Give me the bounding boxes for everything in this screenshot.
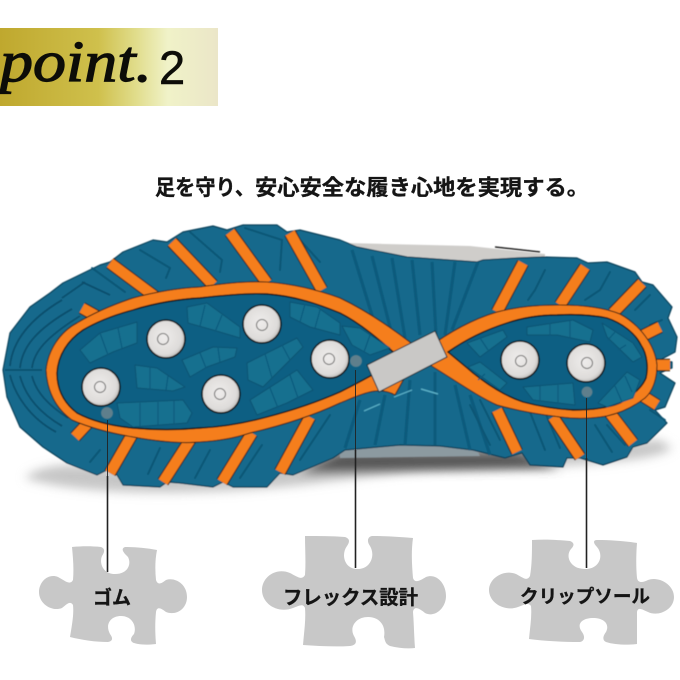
flex plate [367, 331, 447, 392]
label: flex design: フレックス設計 [283, 586, 418, 609]
header banner: point.2: point. [0, 29, 152, 94]
stud 6 [501, 341, 539, 379]
header banner: point.2 [0, 28, 218, 106]
stud 7 [567, 344, 605, 382]
stud 2 [147, 320, 185, 358]
right inner recess [448, 315, 647, 410]
outer lug grooves [90, 228, 665, 478]
studs [82, 305, 605, 413]
leader line: rubber [106, 420, 108, 572]
header banner: point.2: 2 [159, 41, 185, 94]
leader line: flex design [354, 370, 356, 568]
upper of shoe [345, 243, 545, 270]
label: rubber: ゴム [93, 586, 131, 609]
stud 5 [311, 340, 349, 378]
shoe sole illustration [3, 225, 677, 493]
puzzle piece: clip sole [489, 540, 674, 645]
midfoot highlights [364, 389, 438, 411]
inner lug ribs [100, 304, 632, 426]
headline: 足を守り、 [155, 176, 255, 200]
dark shadow under midfoot [300, 452, 560, 472]
headline: 安心安全な履き心地を実現する。 [255, 176, 589, 200]
left inner recess [57, 294, 400, 430]
orange figure-eight band [46, 282, 657, 443]
inner lugs [80, 302, 642, 427]
puzzle piece: rubber [39, 546, 187, 645]
teal outsole [3, 225, 677, 487]
stud 4 [202, 375, 240, 413]
stud 1 [82, 368, 120, 406]
leader line: clip sole [586, 398, 588, 568]
label: clip sole: クリップソール [520, 586, 650, 607]
orange tread branches [75, 232, 670, 482]
leader anchor dots [101, 355, 592, 419]
ground shadow [25, 440, 672, 493]
puzzle piece: flex design [262, 536, 446, 648]
midfoot ribs [345, 250, 490, 455]
stud 3 [243, 305, 281, 343]
heel grooves [5, 282, 110, 432]
